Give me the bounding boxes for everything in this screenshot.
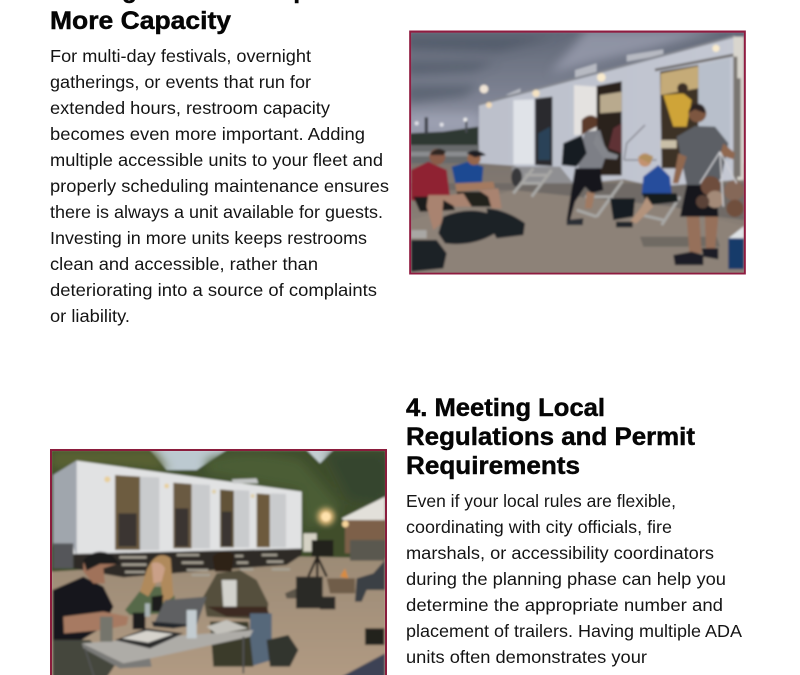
section 4 heading: Requirements [406, 452, 580, 480]
section 3 body text: becomes even more important. Adding [50, 124, 365, 144]
sub-element: trailer steps [513, 168, 680, 225]
section 4 heading [406, 394, 696, 480]
section 3 body text [50, 46, 389, 326]
section 4 heading: 4. Meeting Local [406, 394, 605, 422]
sub-element: camera tripod and equipment cases [285, 540, 385, 645]
sub-element: blonde woman in green jacket [125, 555, 175, 615]
section 4 body text: placement of trailers. Having multiple ADA [406, 621, 742, 641]
section 4 body text: units often demonstrates your [406, 647, 647, 667]
photo: planners at table beside restroom trailers [51, 450, 387, 675]
sub-element: man in grey shirt with ball net [673, 104, 744, 265]
section 4 body text: Even if your local rules are flexible, [406, 491, 676, 511]
section 3 body text: extended hours, restroom capacity [50, 98, 330, 118]
section 3 body text: For multi-day festivals, overnight [50, 46, 311, 66]
section 4 heading: Regulations and Permit [406, 423, 696, 451]
sub-element: seated men in red and blue shirts [411, 149, 502, 230]
sub-element: table with laptop, bottles and folders [82, 597, 253, 675]
sub-element: shadow under trailers [73, 549, 302, 577]
sub-element: trailer steps [119, 555, 290, 575]
sub-element: duffel bags [411, 208, 525, 272]
section 3 body text: multiple accessible units to your fleet and [50, 150, 383, 170]
photo: guests boarding restroom trailer at dusk [407, 30, 745, 277]
sub-element: tent and string lights [303, 497, 385, 561]
section 3 heading: More Capacity [50, 7, 231, 35]
sub-element: backpack [267, 635, 298, 667]
section 3 body text: there is always a unit available for guests. [50, 202, 383, 222]
section 3 heading [50, 0, 345, 35]
section 3 body text: gatherings, or events that run for [50, 72, 311, 92]
section 3 body text: clean and accessible, rather than [50, 254, 318, 274]
sub-element: gravel ground [51, 557, 386, 675]
sub-element: white trailers with open doors [53, 461, 302, 568]
section 4 body text: during the planning phase can help you [406, 569, 726, 589]
section 4 body text: coordinating with city officials, fire [406, 517, 672, 537]
sub-element: crouching woman in blue [610, 153, 678, 227]
sub-element: man in black shirt and cap [53, 552, 128, 675]
section 4 body text: marshals, or accessibility coordinators [406, 543, 714, 563]
section 3 body text: properly scheduling maintenance ensures [50, 176, 389, 196]
section 4 body text: determine the appropriate number and [406, 595, 723, 615]
section 3 body text: Investing in more units keeps restrooms [50, 228, 367, 248]
sub-element: trailer body [479, 36, 744, 187]
sub-element: woman with backpack on steps [562, 115, 622, 225]
sub-element: cooler [728, 226, 744, 269]
section 3 body text: or liability. [50, 306, 130, 326]
section 3 body text: deteriorating into a source of complaints [50, 280, 377, 300]
section 4 body text [406, 491, 742, 667]
sub-element: man in plaid shirt [203, 551, 272, 667]
